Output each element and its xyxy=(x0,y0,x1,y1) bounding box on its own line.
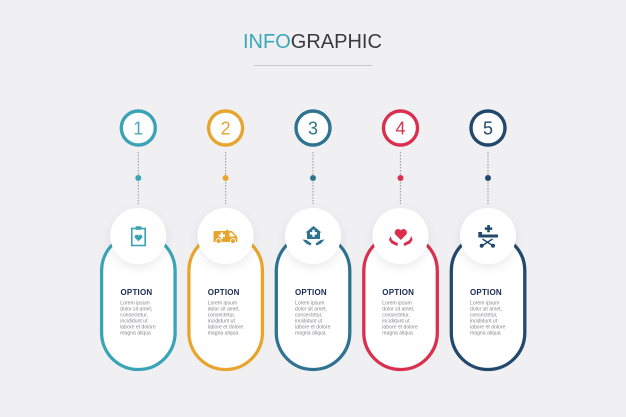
icon: heart in hands xyxy=(389,229,413,246)
number badge 2 xyxy=(209,111,243,145)
text block 4: consectetur, xyxy=(382,312,410,318)
panel: option 1 xyxy=(102,111,175,370)
pill card 1 xyxy=(102,234,175,370)
panel: option 4 xyxy=(364,111,437,370)
text block 5: labore et dolore xyxy=(470,324,506,330)
icon circle 5 xyxy=(460,208,516,264)
number badge 5 xyxy=(471,111,505,145)
text block 2: Lorem ipsum xyxy=(208,300,237,306)
text block 1: labore et dolore xyxy=(120,324,156,330)
icon: clipboard heart xyxy=(132,226,145,246)
connector 2 xyxy=(223,152,229,204)
text block 1: dolor sit amet, xyxy=(120,306,152,312)
icon: ambulance xyxy=(214,230,238,244)
text block 2: consectetur, xyxy=(208,312,235,318)
connector 3 xyxy=(310,152,316,204)
number badge 3: 3 xyxy=(308,118,318,138)
number badge 1: 1 xyxy=(133,118,143,138)
text block 4: dolor sit amet, xyxy=(382,306,414,312)
pill card 5 xyxy=(451,234,525,370)
icon circle 1 xyxy=(110,208,166,264)
text block 4: labore et dolore xyxy=(382,324,418,330)
text block 3: consectetur, xyxy=(295,312,322,318)
text block 3 xyxy=(295,288,331,336)
text block 1: Lorem ipsum xyxy=(120,300,150,306)
text block 1: OPTION xyxy=(120,288,152,297)
number badge 5: 5 xyxy=(483,118,493,138)
icon circle 2 xyxy=(198,208,254,264)
number badge 2: 2 xyxy=(221,118,231,138)
text block 5: OPTION xyxy=(470,288,502,297)
text block 2: OPTION xyxy=(208,288,240,297)
text block 2: labore et dolore xyxy=(208,324,243,330)
text block 5: consectetur, xyxy=(470,312,497,318)
text block 1 xyxy=(120,288,156,336)
number badge 1 xyxy=(121,111,155,145)
text block 5: magna aliqua xyxy=(470,330,501,336)
connector 4 xyxy=(398,152,404,204)
number badge 4: 4 xyxy=(395,118,406,138)
text block 4 xyxy=(382,288,418,336)
icon circle 4 xyxy=(372,208,428,264)
text block 1: consectetur, xyxy=(120,312,148,318)
pill card 4 xyxy=(364,234,437,370)
text block 5: incididunt ut xyxy=(470,318,498,324)
text block 5: Lorem ipsum xyxy=(470,300,499,306)
text block 3: dolor sit amet, xyxy=(295,306,327,312)
text block 1: magna aliqua xyxy=(120,330,151,336)
text block 2: magna aliqua xyxy=(208,330,238,336)
pill card 3 xyxy=(276,234,350,370)
title: INFOGRAPHIC xyxy=(243,31,382,53)
text block 2: dolor sit amet, xyxy=(208,306,240,312)
number badge 4 xyxy=(384,111,418,145)
text block 4: OPTION xyxy=(382,288,414,297)
text block 2: incididunt ut xyxy=(208,318,235,324)
pill card 2 xyxy=(189,234,262,370)
text block 2 xyxy=(208,288,243,336)
text block 3: labore et dolore xyxy=(295,324,331,330)
text block 3: OPTION xyxy=(295,288,327,297)
text block 5: dolor sit amet, xyxy=(470,306,502,312)
connector 1 xyxy=(135,152,141,204)
text block 3: Lorem ipsum xyxy=(295,300,324,306)
text block 1: incididunt ut xyxy=(120,318,148,324)
panel: option 3 xyxy=(276,111,350,370)
text block 4: Lorem ipsum xyxy=(382,300,412,306)
panel: option 5 xyxy=(451,111,525,370)
text block 5 xyxy=(470,288,506,336)
number badge 3 xyxy=(296,111,330,145)
text block 4: incididunt ut xyxy=(382,318,410,324)
icon: stretcher with cross xyxy=(478,225,498,248)
connector 5 xyxy=(485,152,491,204)
text block 3: incididunt ut xyxy=(295,318,323,324)
text block 4: magna aliqua xyxy=(382,330,413,336)
icon: house in hands xyxy=(302,226,324,246)
panel: option 2 xyxy=(189,111,262,370)
text block 3: magna aliqua xyxy=(295,330,326,336)
icon circle 3 xyxy=(285,208,341,264)
